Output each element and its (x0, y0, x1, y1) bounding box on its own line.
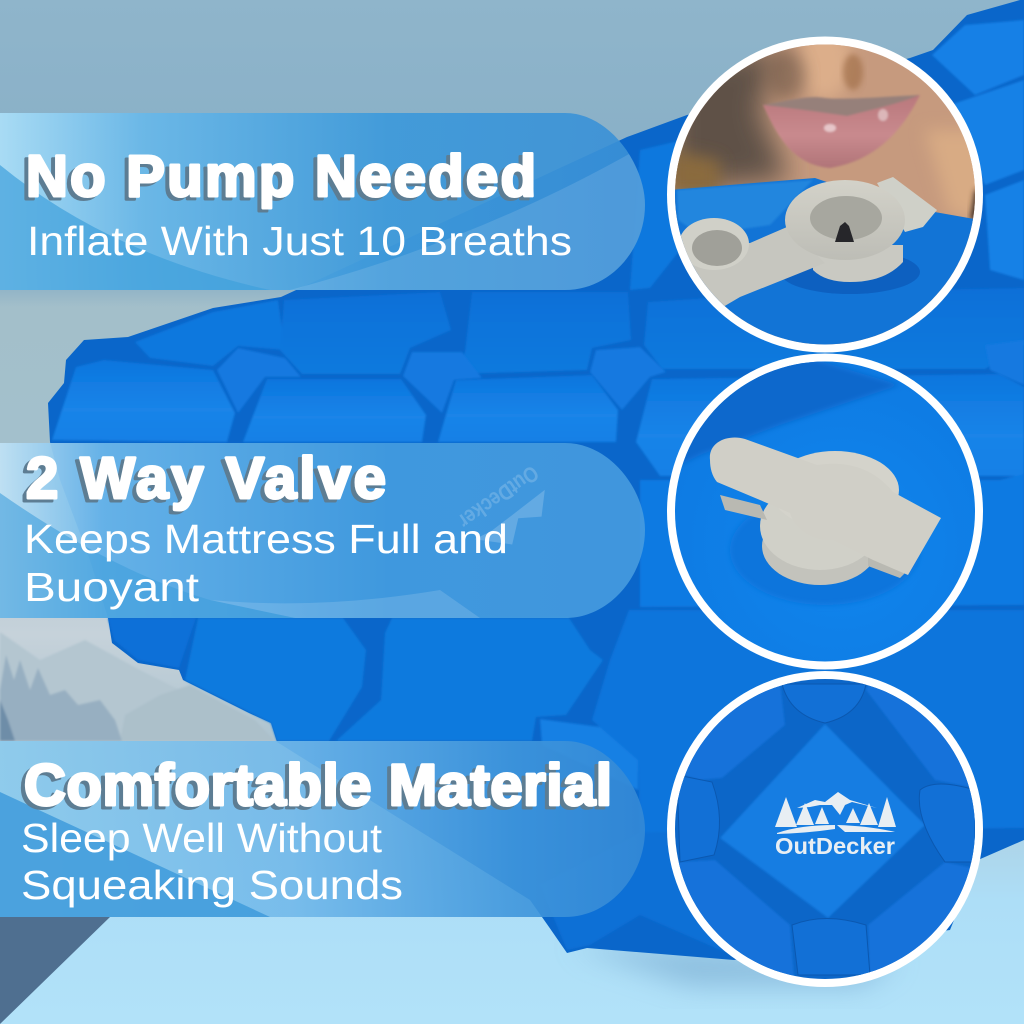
dark diagonal corner (0, 917, 110, 1024)
panel: no pump needed (0, 113, 645, 290)
centre diamond (720, 724, 925, 918)
subheading (21, 815, 403, 908)
mattress shadow (570, 945, 900, 985)
faint logo (454, 461, 563, 562)
valve ring (785, 180, 905, 260)
heading: No Pump Needed (26, 144, 536, 209)
heading: Comfortable Material (24, 753, 612, 818)
mattress cells, upper row (52, 20, 1024, 607)
left valve strap (681, 218, 813, 306)
background mountains (0, 632, 280, 745)
skin shading (675, 44, 975, 221)
heading: 2 Way Valve (26, 446, 386, 511)
subheading: Squeaking Sounds (21, 862, 403, 908)
panel: comfortable material (0, 741, 645, 917)
panel background (0, 741, 645, 917)
diagonal tubes (678, 685, 970, 976)
logo trees and mountains (775, 792, 896, 834)
valve neck (813, 245, 903, 282)
subheading (24, 516, 508, 610)
subheading: Sleep Well Without (21, 815, 383, 861)
right valve tab (877, 177, 937, 232)
subheading: Buoyant (24, 564, 200, 610)
mattress knots, upper row (217, 340, 1024, 413)
logo (775, 792, 896, 859)
darker upper tube (682, 362, 896, 468)
photo circle: valve close-up (667, 354, 983, 671)
faint logo: OutDecker (454, 461, 544, 534)
mattress cells, lower row (108, 610, 1024, 956)
panel: 2 way valve (0, 443, 645, 618)
logo wordmark: OutDecker (775, 833, 895, 859)
panel background (0, 113, 645, 290)
panel background (0, 443, 645, 618)
valve hole (810, 196, 882, 240)
lips (763, 95, 920, 168)
valve base (760, 451, 899, 585)
subheading: Keeps Mattress Full and (24, 516, 508, 562)
valve clip underside (720, 495, 906, 578)
valve flap (710, 438, 941, 575)
photo circle: mouth inflating valve (667, 20, 990, 360)
blue mattress under valve (675, 178, 973, 344)
valve pin (835, 222, 854, 242)
subheading: Inflate With Just 10 Breaths (27, 218, 572, 264)
base seal (732, 510, 917, 604)
knots (677, 684, 975, 975)
photo circle: logo close-up (667, 671, 983, 988)
